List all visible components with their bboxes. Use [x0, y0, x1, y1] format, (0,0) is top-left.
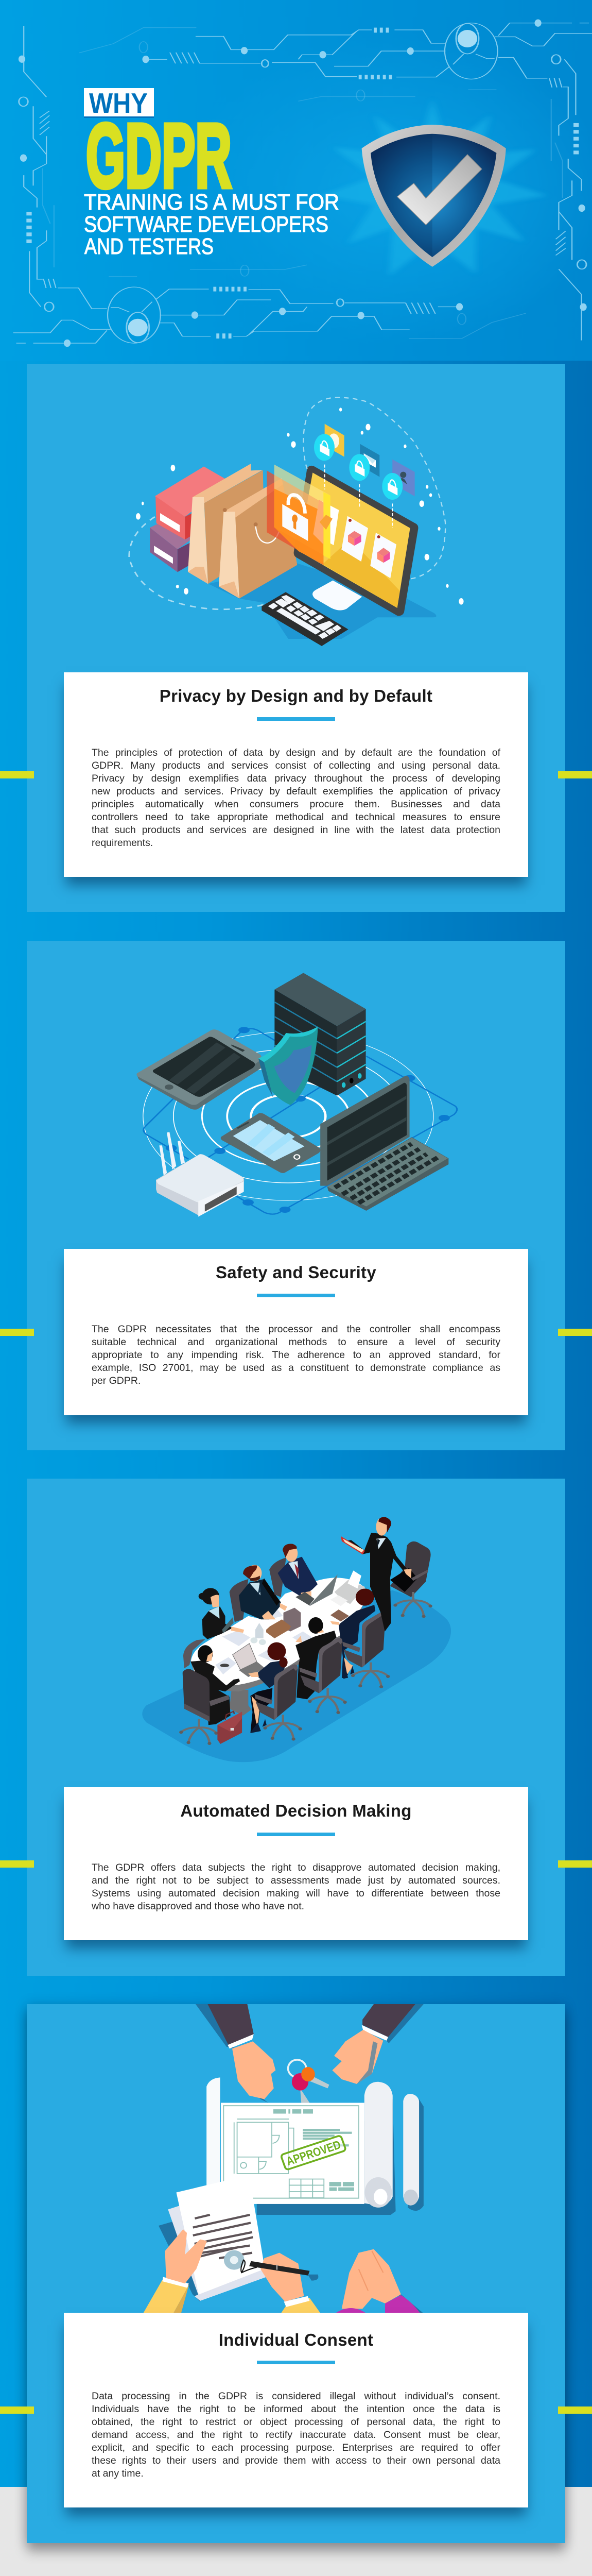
chair	[179, 1639, 230, 1745]
text block	[92, 2391, 500, 2479]
text block: obtained, the right to restrict or object processing of personal data, the right to	[92, 2416, 500, 2428]
text block: appropriate to any impending risk. The adherence to an approved standard, for	[92, 1349, 500, 1361]
accent tick left	[0, 1329, 34, 1336]
front man one	[190, 1645, 240, 1725]
text block: The GDPR offers data subjects the right to disapprove automated decision making,	[92, 1862, 500, 1873]
text block	[92, 747, 500, 849]
books and bottle	[250, 1608, 349, 1645]
accent tick right	[558, 771, 592, 778]
text block: Data processing in the GDPR is considered illegal without individual’s consent.	[92, 2391, 500, 2402]
text block: suitable technical and organizational methods to ensure a level of security	[92, 1336, 500, 1348]
text block: Systems using automated decision making will have to differentiate between those	[92, 1888, 500, 1899]
heading: WHY: WHY	[89, 87, 148, 119]
front woman	[248, 1642, 288, 1733]
accent tick left	[0, 1860, 34, 1868]
accent tick right	[558, 1860, 592, 1868]
text block: at any time.	[92, 2468, 144, 2479]
text block: Privacy by design exemplifies data privacy throughout the process of developing	[92, 773, 500, 784]
heading: Individual Consent	[219, 2330, 373, 2349]
text block: example, ISO 27001, may be used as a constituent to demonstrate compliance as	[92, 1362, 500, 1374]
seated man with beard	[230, 1565, 287, 1622]
accent tick right	[558, 2406, 592, 2414]
heading: subtitle	[84, 190, 339, 259]
card: privacy by design	[64, 672, 528, 877]
text block	[92, 1862, 500, 1912]
text block: principles automatically when consumers procure them. Businesses and data	[92, 799, 500, 810]
text block: controllers need to take appropriate methodical and technical measures to ensure	[92, 811, 500, 823]
heading: subtitle: SOFTWARE DEVELOPERS	[84, 212, 328, 237]
stamp: approved: APPROVED	[285, 2139, 343, 2168]
standing chair	[390, 1541, 432, 1618]
heading: Safety and Security	[216, 1263, 376, 1282]
divider	[257, 2361, 335, 2364]
panel: privacy by design	[27, 364, 565, 912]
text block: these rights to their users and provide them with access to their own personal data	[92, 2455, 500, 2466]
card: automated decision making	[64, 1787, 528, 1940]
text block: The GDPR necessitates that the processor and the controller shall encompass	[92, 1324, 500, 1335]
laptop front and phone	[220, 1643, 265, 1677]
heading: subtitle: TRAINING IS A MUST FOR	[84, 190, 339, 215]
hero banner	[0, 0, 592, 361]
text block	[92, 1324, 500, 1386]
presenter standing	[341, 1517, 411, 1632]
text block: demand access, and the right to rectify inaccurate data. Consent must be clear,	[92, 2429, 500, 2441]
panel: individual consent	[27, 2004, 565, 2543]
heading: subtitle: AND TESTERS	[84, 234, 214, 259]
text block: Individuals have the right to be informed about the intention once the data is	[92, 2403, 500, 2415]
divider	[257, 1833, 335, 1836]
card: safety and security	[64, 1249, 528, 1415]
text block: per GDPR.	[92, 1375, 141, 1386]
panel: safety and security	[27, 941, 565, 1450]
divider	[257, 1294, 335, 1297]
seated man with red tie	[269, 1544, 318, 1598]
heading: Automated Decision Making	[180, 1801, 412, 1820]
illustration: secure devices network	[136, 973, 458, 1217]
text block: new products and services. Privacy by default exemplifies the application of privacy	[92, 786, 500, 797]
text block: explicit, and specific to each processing purpose. Enterprises are required to offer	[92, 2442, 500, 2453]
circuit pattern	[13, 19, 592, 347]
accent tick left	[0, 2406, 34, 2414]
accent tick left	[0, 771, 34, 778]
accent tick right	[558, 1329, 592, 1336]
laptop and printer	[295, 1570, 365, 1606]
front woman two	[330, 1588, 375, 1679]
text block: and the right not to be subject to assessments made just by automated sources.	[92, 1875, 500, 1886]
illustration: shopping bags and monitor	[128, 397, 464, 646]
divider	[257, 717, 335, 721]
heading: Privacy by Design and by Default	[160, 686, 432, 705]
text block: requirements.	[92, 837, 153, 849]
chairs: front row	[255, 1612, 390, 1741]
illustration: signing approved plans	[143, 2004, 424, 2313]
text block: that such products and services are designed in line with the latest data protection	[92, 824, 500, 836]
text block: The principles of protection of data by design and by default are the foundation of	[92, 747, 500, 758]
panel: automated decision making	[27, 1479, 565, 1976]
briefcase	[217, 1711, 242, 1744]
card: individual consent	[64, 2313, 528, 2507]
text block: who have disapproved and those who have not.	[92, 1901, 304, 1912]
text block: GDPR. Many products and services consist of collecting and using personal data.	[92, 760, 500, 771]
illustration: boardroom meeting	[142, 1517, 451, 1762]
left seated woman	[199, 1588, 244, 1639]
front man two	[295, 1617, 337, 1699]
icon: shield with check mark	[321, 99, 547, 276]
heading: GDPR: GDPR	[86, 106, 232, 207]
